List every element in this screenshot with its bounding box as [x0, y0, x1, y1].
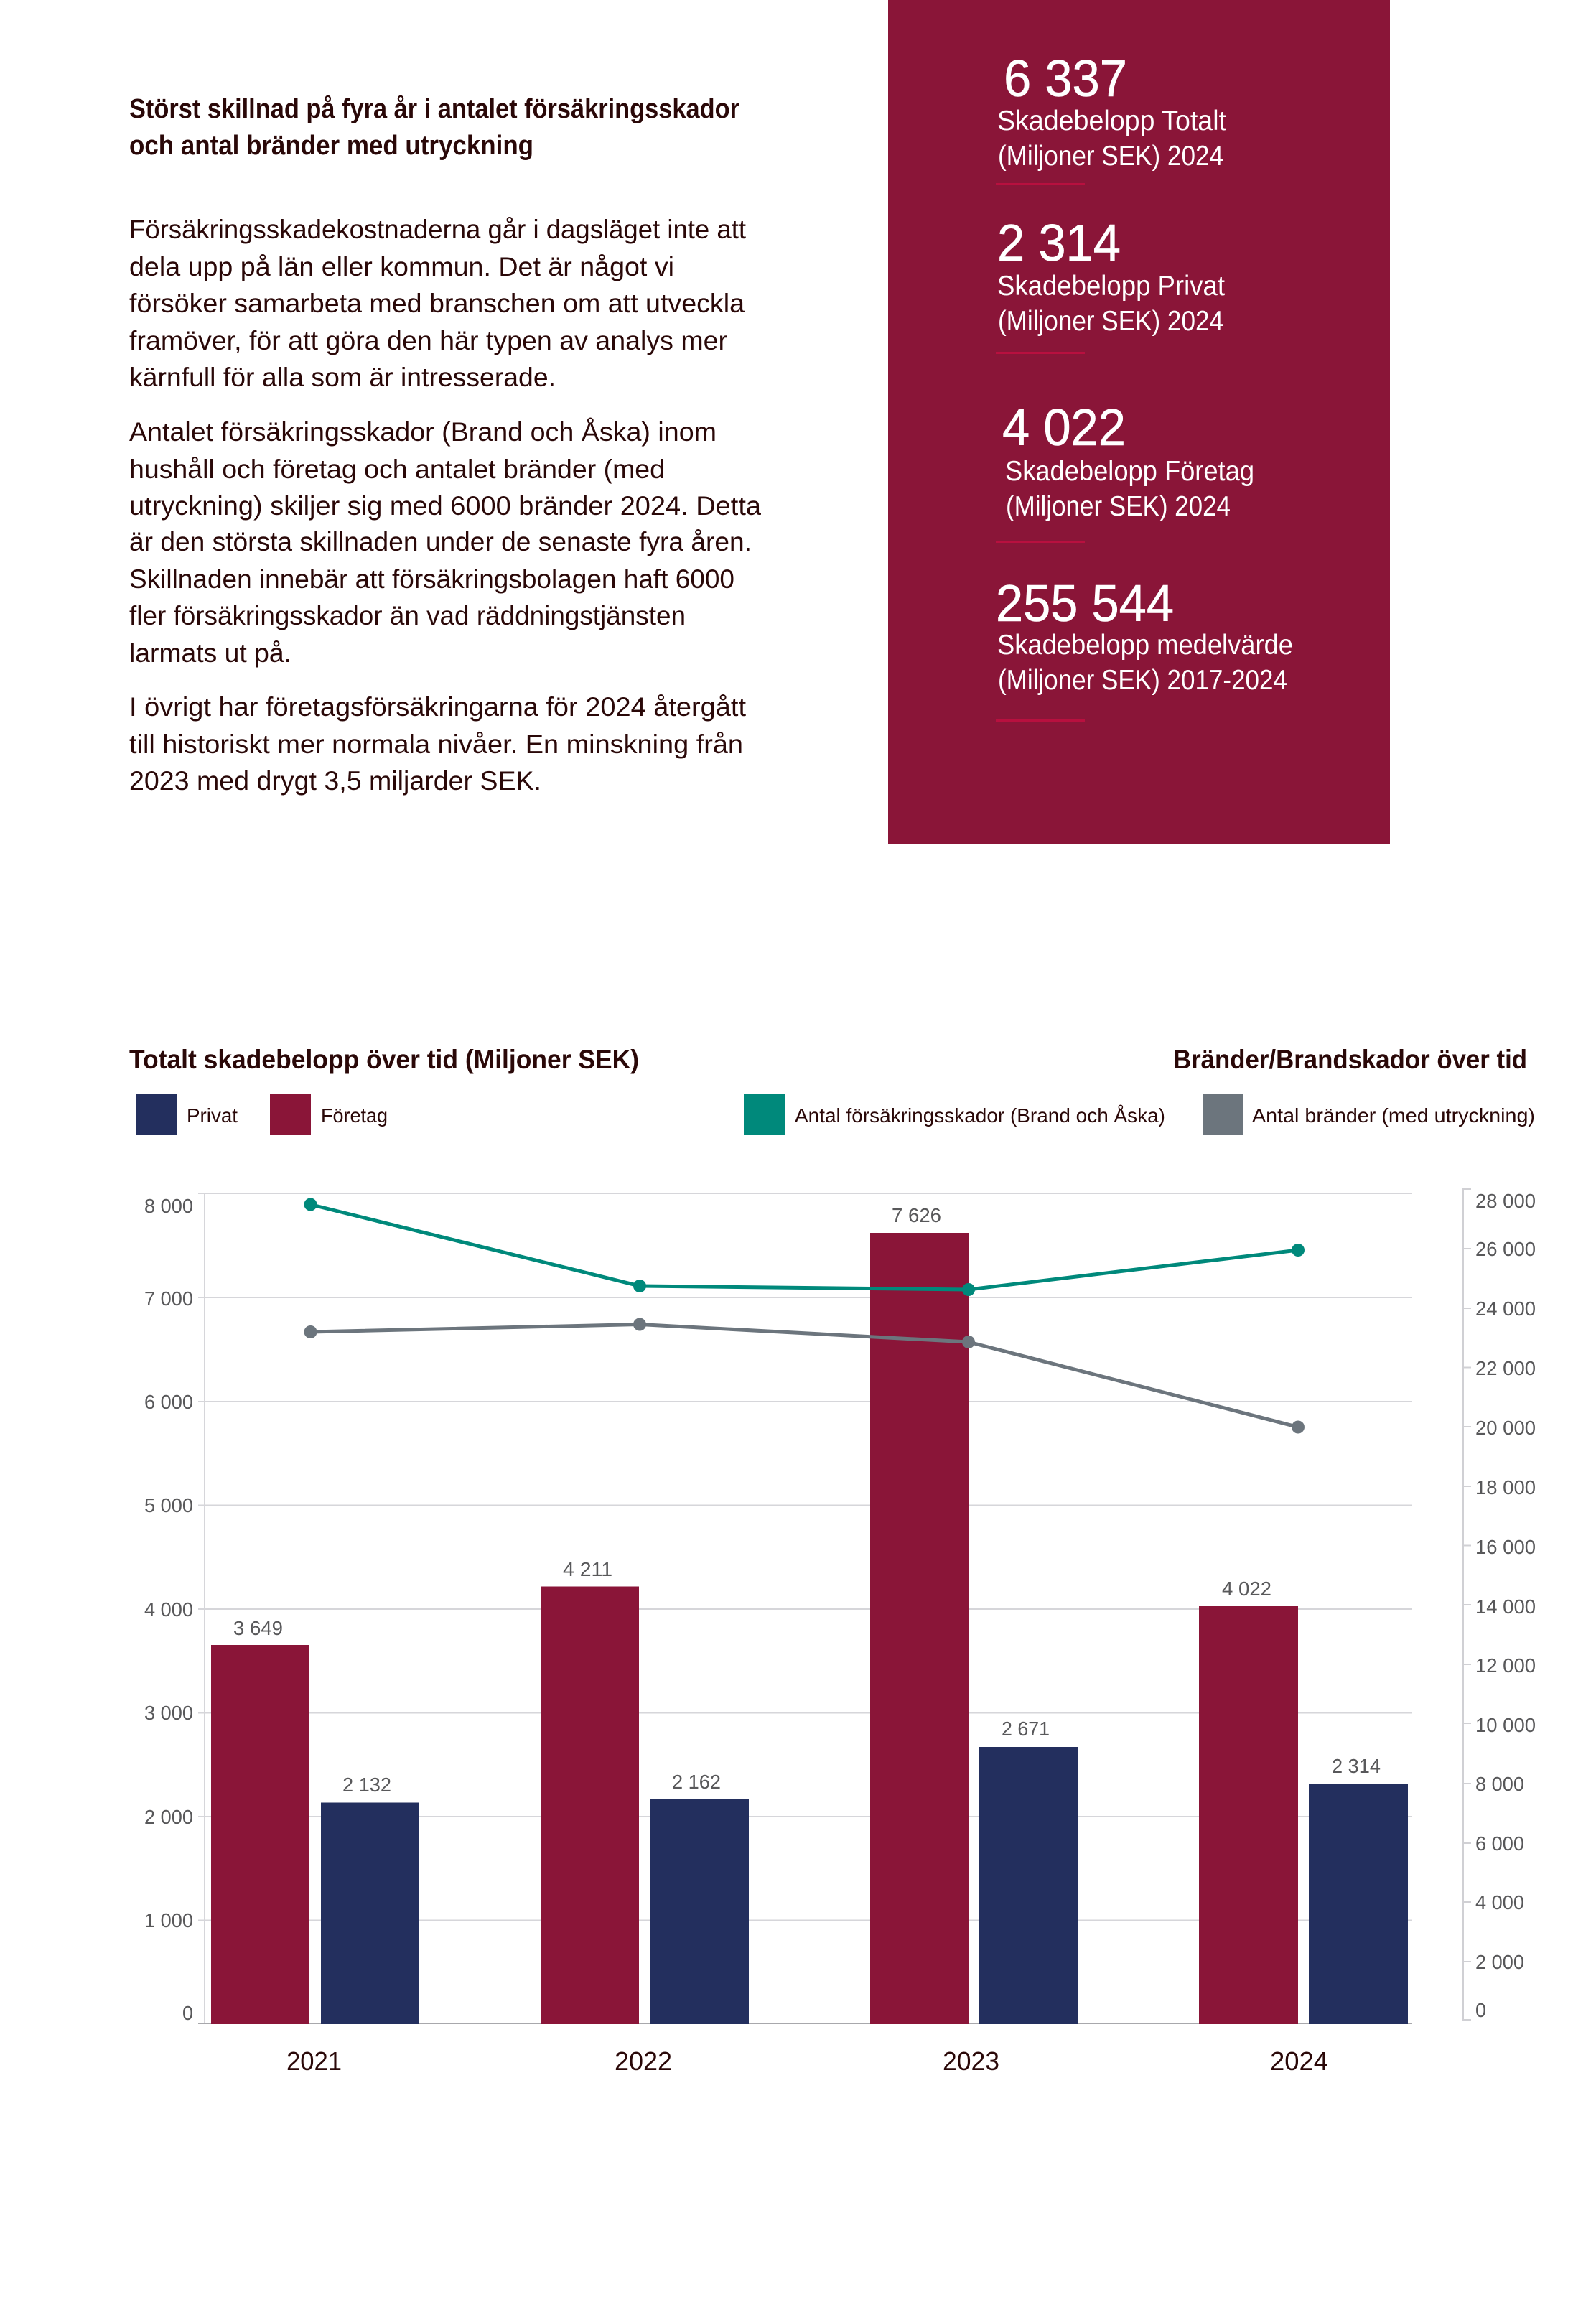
stat: total: (Miljoner SEK) 2024 [998, 141, 1223, 172]
panel: key figures [888, 0, 1390, 844]
legend: företag: Företag [321, 1104, 388, 1127]
right axis: 2 000 [1475, 1951, 1524, 1973]
paragraph 2: är den största skillnaden under de senaste fyra åren. [129, 527, 752, 556]
text block: intro [129, 94, 761, 796]
legend: bränder: Antal bränder (med utryckning) [1252, 1104, 1535, 1127]
paragraph 3: I övrigt har företagsförsäkringarna för 2024 återgått [129, 692, 747, 722]
line: antal bränder [304, 1318, 1305, 1433]
legend: privat: Privat [187, 1104, 238, 1127]
stat: företag: (Miljoner SEK) 2024 [1006, 491, 1231, 522]
stat: medelvärde: (Miljoner SEK) 2017-2024 [998, 665, 1287, 696]
right axis: 28 000 [1475, 1190, 1536, 1212]
left axis labels: 6 000 [144, 1391, 193, 1413]
paragraph 1: framöver, för att göra den här typen av analys mer [129, 326, 727, 355]
left axis labels: 1 000 [144, 1909, 193, 1931]
paragraph 3: 2023 med drygt 3,5 miljarder SEK. [129, 766, 541, 796]
bar value labels: 7 626 [892, 1204, 941, 1226]
bar value labels: 3 649 [233, 1617, 283, 1639]
bar value labels: 4 022 [1222, 1577, 1271, 1600]
right axis: 10 000 [1475, 1714, 1536, 1736]
stat: total [996, 50, 1226, 185]
right axis: 8 000 [1475, 1773, 1524, 1795]
left axis labels: 8 000 [144, 1195, 193, 1217]
legend: försäkringsskador: Antal försäkringsskador (Brand och Åska) [795, 1104, 1165, 1127]
bars: privat [321, 1747, 1408, 2024]
paragraph 2 [129, 417, 761, 668]
right axis: 26 000 [1475, 1238, 1536, 1260]
legend: företag [270, 1094, 388, 1135]
combo chart [144, 1189, 1536, 2076]
left axis labels: 7 000 [144, 1287, 193, 1310]
left axis labels: 5 000 [144, 1494, 193, 1516]
stat: total: Skadebelopp Totalt [997, 106, 1226, 136]
paragraph 1: Försäkringsskadekostnaderna går i dagsläget inte att [129, 215, 747, 244]
x axis year labels: 2023 [943, 2046, 999, 2076]
chart title: skadebelopp: Totalt skadebelopp över tid (Miljoner SEK) [129, 1045, 639, 1074]
left axis labels: 3 000 [144, 1702, 193, 1724]
paragraph 2: utryckning) skiljer sig med 6000 bränder 2024. Detta [129, 491, 761, 521]
stat: företag [996, 399, 1254, 543]
paragraph 2: Skillnaden innebär att försäkringsbolagen haft 6000 [129, 564, 734, 594]
chart title: bränder: Bränder/Brandskador över tid [1173, 1045, 1527, 1074]
stat: privat: Skadebelopp Privat [997, 271, 1225, 302]
bar value labels: 2 314 [1332, 1755, 1381, 1777]
paragraph 3: till historiskt mer normala nivåer. En minskning från [129, 730, 743, 759]
bar value labels: 2 162 [672, 1771, 721, 1793]
bars: företag [211, 1233, 1298, 2024]
left axis labels: 2 000 [144, 1806, 193, 1828]
paragraph 2: fler försäkringsskador än vad räddningstjänsten [129, 601, 686, 630]
legend: bränder [1203, 1094, 1535, 1135]
stat: privat [996, 215, 1225, 354]
left axis labels: 0 [182, 2002, 193, 2024]
bar value labels: 4 211 [563, 1558, 612, 1580]
stat: medelvärde [996, 575, 1293, 722]
bar value labels [233, 1204, 1381, 1796]
legend: privat [136, 1094, 238, 1135]
right axis: 14 000 [1475, 1595, 1536, 1618]
heading: intro: Störst skillnad på fyra år i antalet försäkringsskador [129, 94, 739, 124]
paragraph 2: Antalet försäkringsskador (Brand och Åska) inom [129, 417, 717, 447]
right axis: 22 000 [1475, 1357, 1536, 1379]
paragraph 2: larmats ut på. [129, 638, 291, 668]
gridlines [198, 1193, 1412, 2023]
legend [136, 1094, 1535, 1135]
x axis year labels: 2022 [615, 2046, 672, 2076]
heading: intro [129, 94, 739, 161]
x axis year labels: 2021 [286, 2046, 342, 2076]
right axis: 0 [1475, 1999, 1486, 2021]
paragraph 1: kärnfull för alla som är intresserade. [129, 363, 556, 392]
right axis [1463, 1189, 1536, 2021]
left axis labels: 4 000 [144, 1598, 193, 1621]
stat: total: 6 337 [1004, 50, 1127, 108]
x axis year labels [286, 2046, 1328, 2076]
right axis: 12 000 [1475, 1654, 1536, 1677]
stat: medelvärde: Skadebelopp medelvärde [997, 630, 1293, 661]
bar value labels: 2 671 [1002, 1718, 1050, 1740]
stat: privat: (Miljoner SEK) 2024 [998, 306, 1223, 337]
paragraph 3 [129, 692, 747, 796]
right axis: 24 000 [1475, 1297, 1536, 1320]
stat: medelvärde: 255 544 [996, 575, 1174, 633]
paragraph 1: försöker samarbeta med branschen om att utveckla [129, 289, 745, 318]
stat: företag: 4 022 [1002, 399, 1126, 457]
stat: företag: Skadebelopp Företag [1005, 456, 1254, 487]
paragraph 2: hushåll och företag och antalet bränder (med [129, 455, 665, 484]
heading: intro: och antal bränder med utryckning [129, 131, 533, 161]
right axis: 4 000 [1475, 1891, 1524, 1914]
legend: försäkringsskador [744, 1094, 1165, 1135]
right axis: 18 000 [1475, 1476, 1536, 1499]
line: antal försäkringsskador [304, 1198, 1305, 1296]
stat: privat: 2 314 [997, 215, 1121, 272]
paragraph 1: dela upp på län eller kommun. Det är något vi [129, 252, 674, 281]
right axis: 16 000 [1475, 1536, 1536, 1558]
x axis year labels: 2024 [1270, 2046, 1328, 2076]
paragraph 1 [129, 215, 747, 392]
right axis: 20 000 [1475, 1417, 1536, 1439]
bar value labels: 2 132 [342, 1774, 391, 1796]
left axis labels [144, 1195, 193, 2024]
right axis: 6 000 [1475, 1832, 1524, 1855]
